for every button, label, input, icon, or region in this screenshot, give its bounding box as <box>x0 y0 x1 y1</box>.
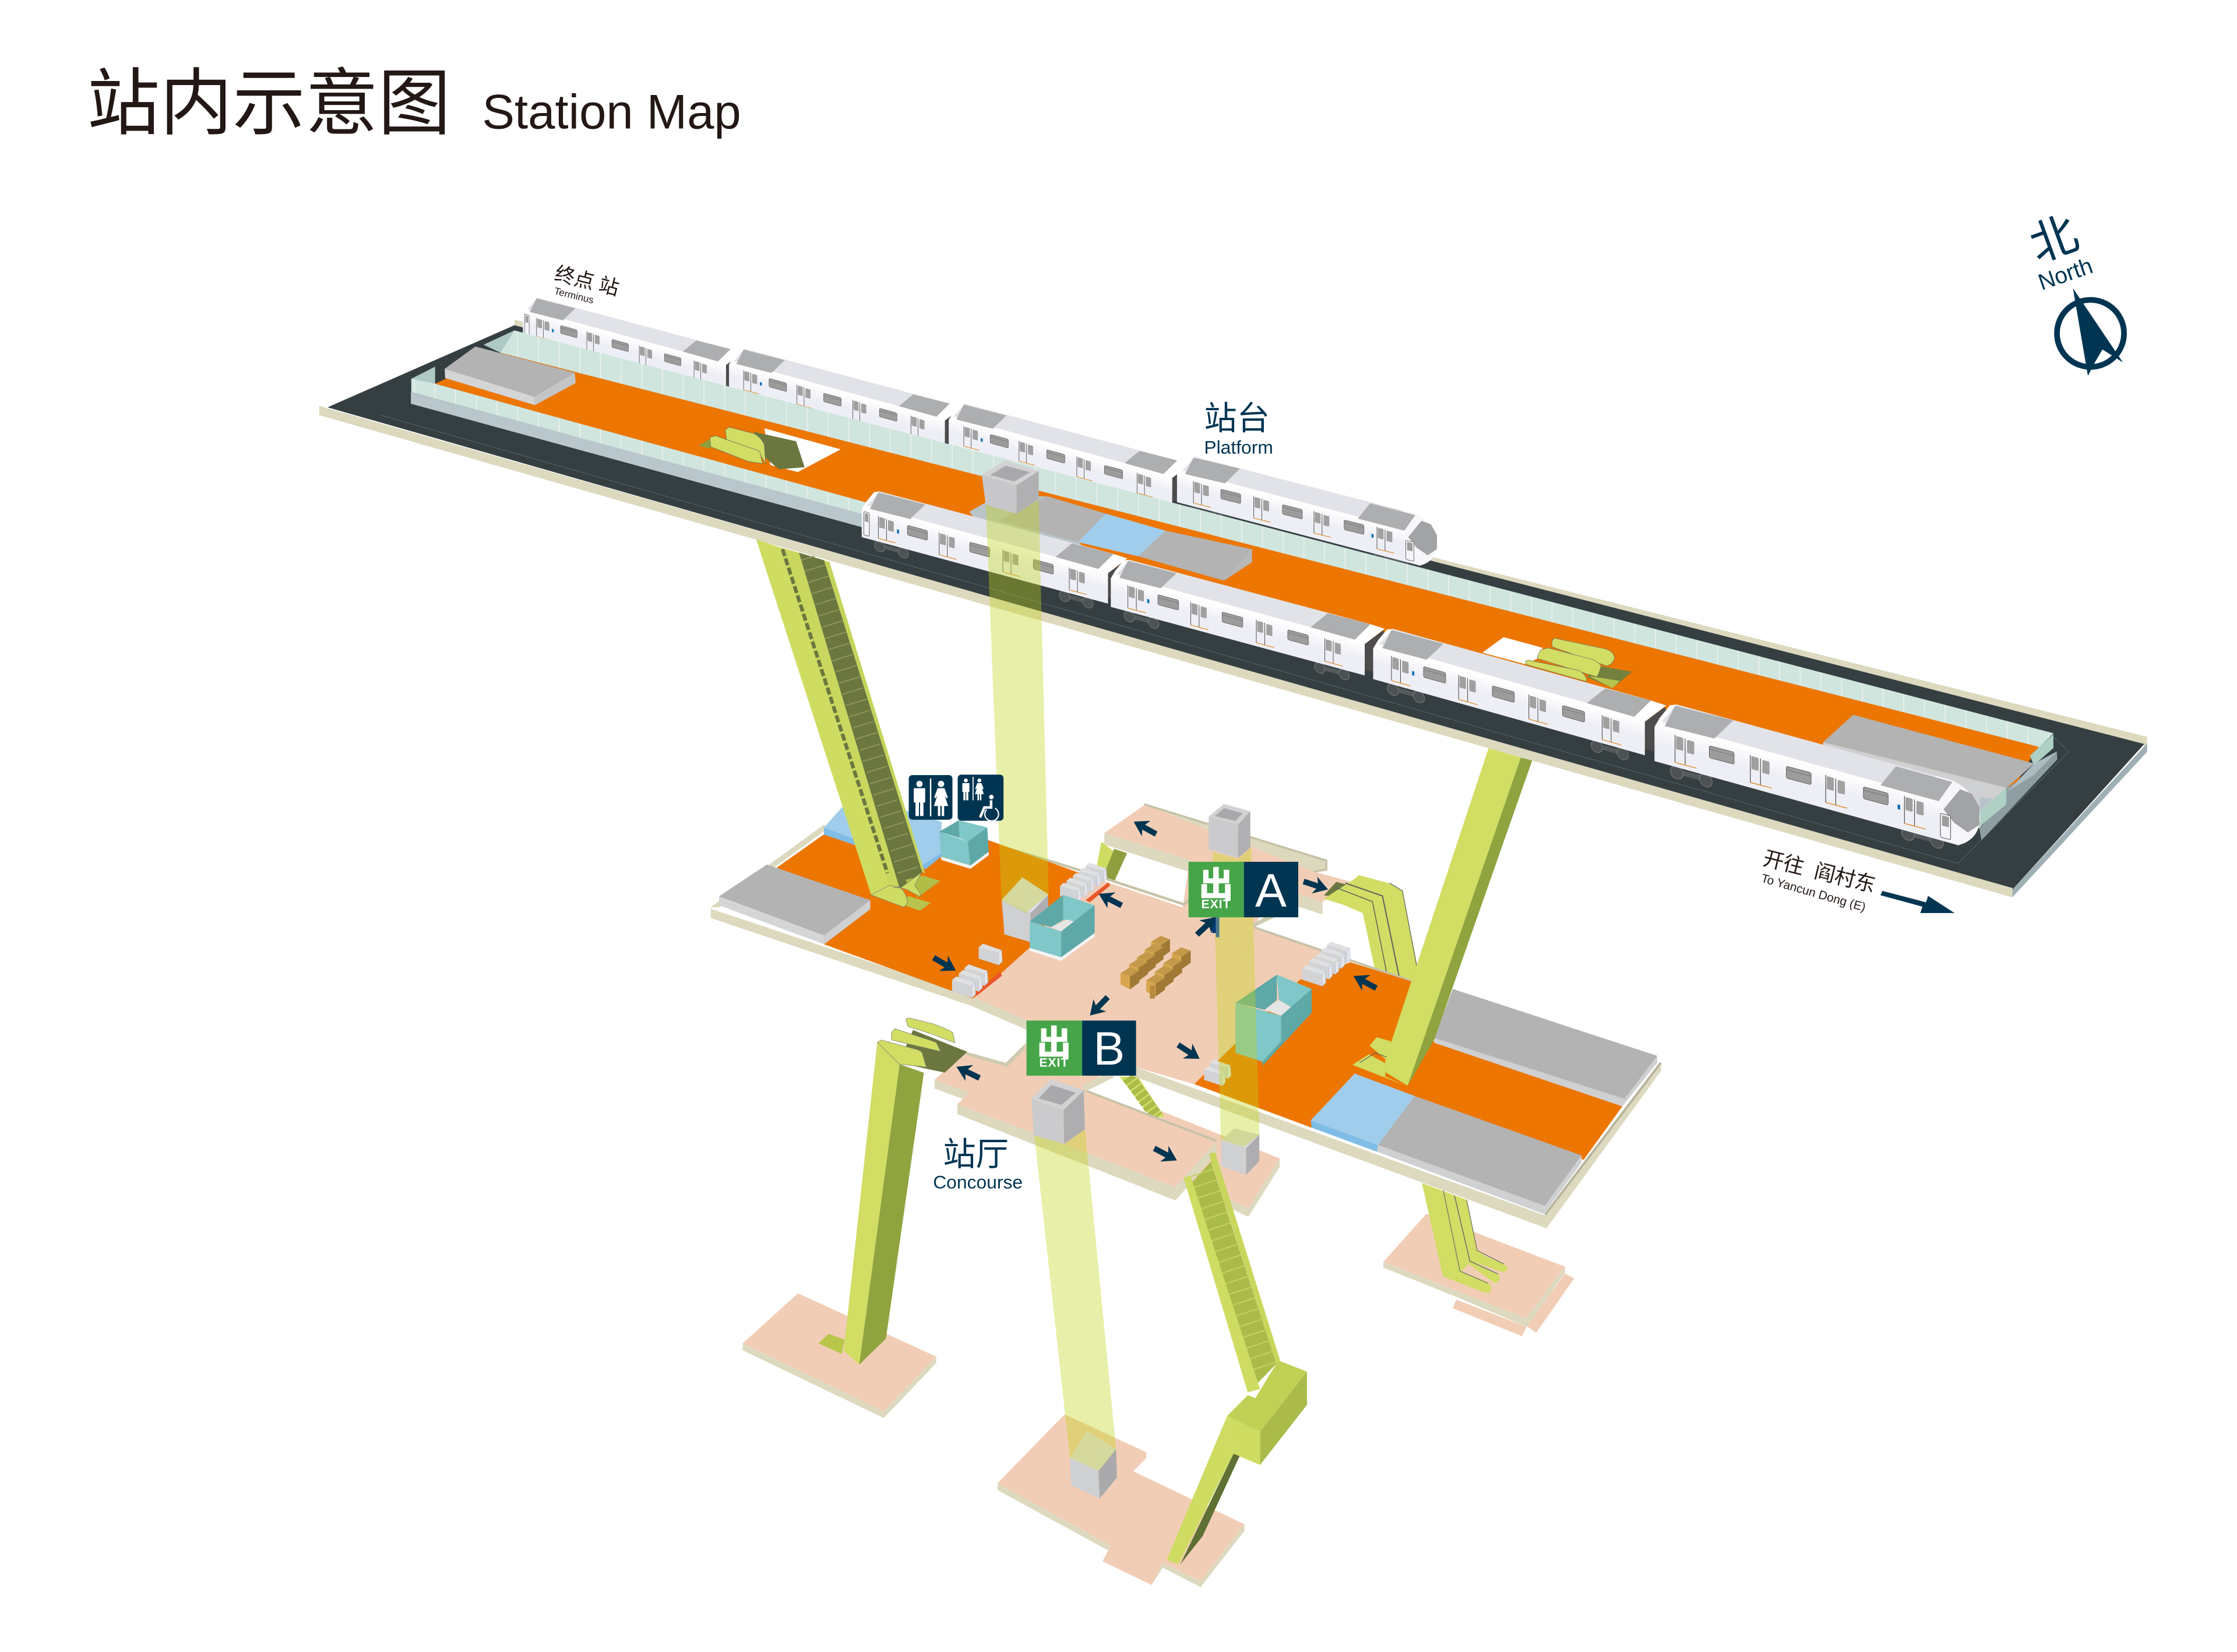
slab edge <box>711 908 1661 1228</box>
front train car 4 <box>1654 699 1980 860</box>
rear train car 1 <box>523 293 744 403</box>
rear train car 4 <box>1177 452 1438 577</box>
mid platform gray and blue blocks <box>969 495 1252 580</box>
ticket gates east <box>1302 942 1350 986</box>
ticket gates southeast <box>1204 1059 1231 1086</box>
label: platform: 站台 <box>1204 400 1270 436</box>
lift shaft west: translucent column <box>986 499 1049 913</box>
blue zone west <box>824 793 942 869</box>
orange zone west <box>776 834 1080 999</box>
exit sign A: 出 <box>1199 866 1233 904</box>
lower ramp <box>1167 1416 1239 1565</box>
long escalator: platform to main hall <box>756 539 940 911</box>
label: concourse: Concourse <box>933 1171 1023 1192</box>
exit sign B <box>1027 1020 1136 1076</box>
platform slab back edge <box>515 319 2147 746</box>
service room: teal back <box>939 820 989 869</box>
escalator: pillar behind corridor A <box>1095 841 1127 882</box>
floor: lift landing below corridor B <box>1158 1110 1280 1217</box>
stair landing box <box>1227 1361 1307 1465</box>
label: terminus: Terminus <box>553 285 595 306</box>
escalator head west <box>699 427 805 469</box>
ticket gates north <box>1060 863 1110 902</box>
front train car 3 <box>1373 622 1669 773</box>
ticket gates south <box>952 943 1002 998</box>
rear train car 2 <box>729 344 964 461</box>
lift base B, on centre landing <box>1070 1431 1117 1499</box>
escalator foot <box>871 872 940 911</box>
floor: centre exit landing <box>998 1414 1245 1587</box>
escalator: corridor B down to left landing <box>819 1018 967 1365</box>
platform slab front edge <box>319 406 2013 897</box>
gray platform stair cover west <box>719 865 870 944</box>
lower ground floors <box>743 1110 1574 1587</box>
front train car 2 <box>1111 554 1387 692</box>
icon: accessible toilet sign <box>958 774 1003 821</box>
compass: 北 <box>2023 207 2085 272</box>
blue zone east <box>1311 1074 1415 1152</box>
paid/unpaid concourse floor <box>970 873 1350 1084</box>
stairwell opening west <box>765 428 841 472</box>
exit sign B: 出 <box>1037 1025 1071 1063</box>
title: Station Map <box>482 84 741 139</box>
escalator: main hall down to right landing <box>1422 1183 1507 1292</box>
label: platform <box>1204 400 1273 458</box>
exit sign B: B <box>1093 1023 1125 1075</box>
exit sign A: EXIT <box>1202 898 1231 911</box>
icon: toilet sign <box>909 775 953 820</box>
escalator head east <box>1526 638 1632 688</box>
lift base A, on lower landing <box>1221 1129 1259 1175</box>
title: 站内示意图 <box>87 63 451 144</box>
label: concourse <box>933 1136 1023 1192</box>
stairwell opening east <box>1482 637 1543 664</box>
service room: teal east <box>1235 975 1312 1066</box>
lift head B <box>1031 1079 1085 1144</box>
rear train car 3 <box>949 399 1192 520</box>
direction arrows <box>929 814 1380 1168</box>
main concourse slab <box>710 793 1661 1228</box>
label: direction of travel: 开往 阎村东 <box>1761 847 1878 897</box>
rear train <box>523 293 1438 577</box>
track bed <box>327 325 2144 889</box>
label: direction of travel: To Yancun Dong (E) <box>1760 872 1867 914</box>
rear platform screen doors <box>484 330 2053 748</box>
corridor A <box>1104 804 1355 927</box>
lift head west <box>982 460 1039 514</box>
front train <box>862 486 1980 860</box>
exit sign A <box>1189 862 1298 917</box>
arrow: direction of travel <box>1880 891 1954 913</box>
compass: North <box>2035 253 2096 295</box>
service room: teal centre <box>1030 895 1095 961</box>
exit sign A: A <box>1255 865 1287 917</box>
label: concourse: 站厅 <box>943 1136 1009 1172</box>
floor: right exit landing <box>1383 1214 1574 1336</box>
gray cover east back <box>1435 989 1657 1107</box>
floor: left exit landing <box>743 1294 936 1418</box>
island platform floor <box>435 353 2039 818</box>
label: platform: Platform <box>1204 437 1273 458</box>
east end gray block and base <box>1823 715 2058 840</box>
lift head A <box>1209 804 1250 858</box>
lift shaft A: translucent column <box>1213 847 1259 1147</box>
gray cover east front <box>1377 1096 1581 1214</box>
title <box>87 63 741 144</box>
gray block west end <box>445 347 576 405</box>
corridor B <box>935 1043 1217 1200</box>
front platform screen doors <box>411 367 873 527</box>
lift shaft B: translucent column <box>1034 1129 1116 1471</box>
lift base west <box>1002 878 1049 942</box>
benches <box>1121 936 1190 999</box>
stair: corridor B down to centre landing <box>1167 1152 1307 1565</box>
escalator: corridor A to main hall <box>1324 875 1417 984</box>
label: terminus: 终点 站 <box>552 263 621 300</box>
escalator pillar: platform to east hall <box>1352 748 1533 1086</box>
front train car 1 <box>862 486 1130 619</box>
stair: behind corridor B <box>1119 1077 1164 1118</box>
platform level <box>319 293 2147 897</box>
compass <box>2023 207 2124 376</box>
orange zone east <box>1195 962 1622 1160</box>
exit sign B: EXIT <box>1039 1056 1069 1070</box>
